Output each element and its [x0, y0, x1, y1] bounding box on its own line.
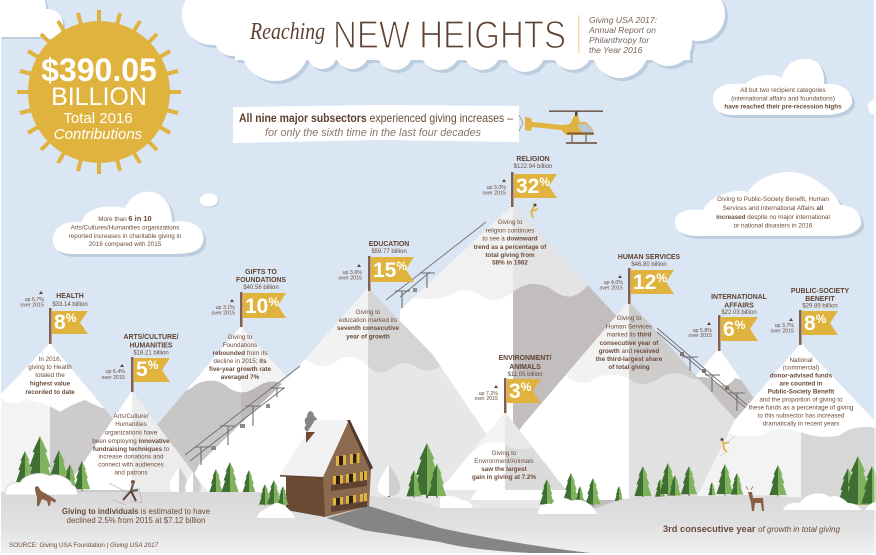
flag group: health: [20, 291, 88, 344]
text: public-society: these funds as a percentage of giving: [749, 404, 854, 412]
flag group: human services: $46.80 billion: [631, 262, 667, 268]
flag group: arts: %: [148, 358, 159, 372]
text: religion: [474, 219, 547, 266]
sun text: amount: $390.05: [41, 52, 157, 88]
cloud: recipient categories: have reached their pre-recession highs: [724, 104, 842, 110]
third consecutive year: 3rd consecutive year of growth in total giving: [663, 524, 840, 534]
small cloud right edge: [868, 99, 876, 115]
white trees: [170, 465, 400, 500]
flag group: environment: %: [521, 380, 532, 394]
text: human services: Giving to: [617, 315, 642, 322]
text: health: [25, 356, 75, 396]
mountain: public-society: [690, 343, 876, 510]
text: religion: religion continues: [485, 228, 535, 234]
cloud: disasters note: [675, 172, 864, 239]
flag group: religion: over 2015: [482, 190, 506, 196]
flag group: public-society: PUBLIC-SOCIETY: [791, 288, 849, 295]
flag group: public-society: $29.89 billion: [802, 304, 838, 310]
report subtitle: Giving USA 2017:: [589, 15, 658, 25]
report subtitle: Annual Report on: [588, 25, 656, 35]
cloud: recipient categories: [713, 59, 855, 118]
windows: [333, 453, 367, 507]
text: foundations: averaged 7%: [221, 374, 260, 381]
trees and snow by the house: [257, 480, 295, 518]
ski lift: left: [185, 222, 486, 465]
flag group: environment: ANIMALS: [509, 364, 541, 371]
cloud: recipient categories: All but two recipient categories: [740, 87, 826, 94]
road: [327, 506, 590, 553]
flag group: education: EDUCATION: [369, 241, 409, 248]
flag group: religion: 32: [516, 175, 539, 198]
text: religion: total giving from: [485, 252, 535, 259]
side wall: [286, 476, 325, 517]
flag group: human services: %: [656, 271, 667, 285]
mountain: arts: [65, 391, 210, 495]
text: religion: Giving to: [498, 219, 523, 226]
text: public-society: and the proportion of giving to: [759, 396, 843, 404]
text: environment: Environment/Animals: [474, 458, 534, 465]
sun text: billion: BILLION: [51, 83, 147, 111]
chimney: [306, 432, 315, 443]
flag group: religion: up 3.0%: [487, 185, 506, 191]
text: arts: increase donations and: [98, 454, 164, 460]
flag group: foundations: FOUNDATIONS: [236, 277, 286, 284]
text: public-society: dramatically in recent years: [763, 420, 839, 428]
flag group: education: [338, 241, 414, 291]
balconies: [331, 480, 367, 491]
sun: total contributions: [17, 10, 181, 174]
text: arts: Arts/Culture/: [114, 413, 149, 420]
flag group: environment: $11.05 billion: [508, 372, 542, 378]
cloud: disasters note: or national disasters in 2016: [734, 222, 813, 230]
title: [249, 14, 566, 57]
cloud: disasters note: Services and International Affairs all: [723, 205, 824, 212]
front wall: [323, 422, 371, 517]
flag group: arts: HUMANITIES: [130, 342, 173, 350]
text: environment: [472, 450, 536, 481]
cloud: disasters note: increased despite no major international: [716, 214, 830, 221]
flag group: human services: over 2015: [599, 286, 623, 292]
flag group: human services: up 4.0%: [604, 280, 623, 286]
flag group: environment: ENVIRONMENT/: [499, 355, 551, 362]
flag group: public-society: 8: [804, 312, 816, 335]
flag group: international: 6: [723, 318, 735, 341]
flag group: religion: [482, 156, 557, 207]
mountain: religion: [400, 206, 616, 508]
text: education: Giving to: [356, 309, 381, 316]
text: health: highest value: [30, 380, 71, 388]
banner: [233, 105, 519, 143]
cross-country skier: [109, 480, 143, 505]
flag group: environment: over 2015: [474, 396, 498, 402]
flag group: health: over 2015: [20, 302, 44, 308]
deer: left: [35, 486, 56, 506]
cloud: arts organizations: 2016 compared with 2015: [89, 241, 162, 248]
flag group: education: over 2015: [338, 276, 362, 282]
text: human services: Human Services: [606, 324, 652, 330]
flag group: foundations: 10: [245, 295, 268, 318]
cloud: title: [182, 0, 728, 84]
text: religion: to see a downward: [482, 236, 538, 242]
cloud: arts organizations: reported increases in charitable giving in: [69, 233, 182, 240]
text: public-society: National: [789, 357, 813, 364]
text: giving by individuals: Giving to individuals is estimated to have: [62, 507, 210, 516]
flag group: international: up 5.8%: [693, 328, 712, 334]
text: giving by individuals: declined 2.5% from 2015 at $7.12 billion: [67, 516, 205, 525]
ground: [0, 492, 876, 553]
flag group: environment: [474, 355, 551, 413]
flag group: education: %: [396, 259, 407, 273]
report subtitle: [588, 15, 658, 55]
flag group: public-society: up 3.7%: [775, 323, 794, 329]
cloud: disasters note: Giving to Public-Society Benefit, Human: [717, 196, 829, 203]
flag group: arts: over 2015: [101, 375, 125, 381]
text: arts: and patrons: [114, 470, 148, 476]
text: public-society: Public-Society Benefit: [768, 388, 835, 396]
flag group: religion: RELIGION: [516, 156, 550, 163]
text: public-society: [749, 357, 854, 428]
flag group: health: up 5.7%: [25, 297, 44, 303]
flag group: environment: up 7.2%: [479, 391, 498, 397]
flag group: human services: HUMAN SERVICES: [618, 254, 681, 261]
flag group: human services: 12: [633, 271, 656, 294]
text: arts: connect with audiences: [98, 462, 164, 468]
chimney smoke: [304, 411, 318, 432]
text: education: education marked its: [339, 317, 397, 324]
text: foundations: five-year growth rate: [209, 366, 271, 373]
name and amount: HEALTH: [56, 293, 84, 300]
mountain: education: [194, 288, 544, 508]
text: education: year of growth: [346, 334, 390, 340]
cloud: arts organizations: More than 6 in 10: [98, 214, 152, 223]
pole: [49, 308, 52, 344]
mountain: international: [696, 350, 754, 420]
text: health: totaled the: [35, 372, 65, 379]
report subtitle: the Year 2016: [589, 45, 643, 55]
flag group: international: %: [735, 318, 746, 332]
cloud: top-left: [0, 0, 65, 41]
banner: line two: for only the sixth time in the last four decades: [265, 127, 481, 139]
flag: [52, 311, 88, 334]
flag group: foundations: %: [268, 295, 279, 309]
flag group: international: [688, 294, 767, 351]
text: health: giving to Health: [28, 364, 72, 371]
text: health: recorded to date: [25, 389, 75, 396]
text: public-society: donor-advised funds: [770, 372, 833, 380]
small cloud bubble: [200, 194, 219, 208]
flag group: foundations: over 2015: [211, 310, 235, 316]
flag group: foundations: $40.56 billion: [243, 285, 279, 291]
text: arts: fundraising techniques to: [93, 446, 170, 453]
mountain: health: [1, 344, 130, 492]
flag group: education: 15: [373, 259, 396, 282]
text: environment: saw the largest: [481, 466, 528, 473]
flag group: foundations: GIFTS TO: [245, 269, 277, 276]
text: religion: trend as a percentage of: [474, 244, 547, 251]
text: giving by individuals: [62, 507, 210, 525]
text: education: seventh consecutive: [337, 325, 399, 332]
flag group: education: $59.77 billion: [371, 249, 407, 255]
flag group: religion: %: [539, 175, 550, 189]
title: reaching: Reaching: [249, 19, 325, 45]
flag group: religion: $122.94 billion: [514, 164, 552, 170]
divider: [578, 15, 580, 54]
text: foundations: Giving to: [228, 334, 253, 341]
flag group: public-society: [770, 288, 849, 345]
text: arts: Humanities: [115, 421, 147, 428]
text: public-society: (commercial): [783, 364, 819, 372]
flag group: human services: [599, 254, 681, 304]
flag group: foundations: up 3.1%: [216, 305, 235, 311]
flag group: public-society: over 2015: [770, 328, 794, 334]
skier on public slope: [720, 436, 735, 456]
text: foundations: rebounded from its: [213, 350, 267, 357]
ski lift: right: [657, 328, 747, 411]
text: arts: organizations have: [105, 430, 158, 436]
text: education: [337, 309, 399, 340]
skier on religion peak: [531, 204, 538, 218]
report subtitle: Philanthropy for: [589, 35, 650, 45]
sun text: contributions: Contributions: [54, 126, 143, 143]
text: foundations: [209, 334, 271, 381]
snow bushes: [5, 474, 876, 514]
flag group: health: $33.14 billion: [52, 302, 88, 308]
text: environment: Giving to: [492, 450, 517, 457]
cloud: arts organizations: [53, 192, 206, 257]
flag group: arts: $18.21 billion: [133, 350, 169, 356]
sun text: total 2016: Total 2016: [63, 110, 133, 127]
flag group: public-society: %: [816, 312, 827, 326]
text: public-society: to this subsector has increased: [758, 412, 845, 420]
text: arts: been employing innovative: [92, 438, 170, 445]
text: foundations: Foundations: [223, 342, 257, 349]
text: human services: marked its third: [607, 332, 652, 338]
deer: right: [746, 486, 764, 511]
helicopter: [519, 110, 603, 143]
text: human services: the third-largest share: [596, 356, 663, 363]
banner: line one: All nine major subsectors experienced giving increases –: [239, 112, 513, 125]
flag group: public-society: BENEFIT: [805, 296, 836, 303]
flag group: international: over 2015: [688, 333, 712, 339]
text: human services: [596, 315, 663, 371]
text: religion: 58% in 1982: [492, 260, 528, 266]
source: SOURCE: Giving USA Foundation | Giving USA 2017: [9, 542, 159, 549]
roof: [280, 420, 347, 477]
text: foundations: decline in 2015; its: [213, 358, 267, 365]
flag group: international: $22.03 billion: [721, 310, 757, 316]
text: public-society: are counted in: [779, 380, 823, 388]
flag group: arts: [101, 334, 179, 392]
mountain: human services: [470, 302, 736, 500]
text: human services: growth and received: [599, 348, 659, 355]
cloud: recipient categories: (international affairs and foundations): [731, 96, 835, 102]
mountain: environment: [440, 412, 566, 490]
cloud: arts organizations: Arts/Cultures/Humanities organizations: [71, 224, 179, 232]
flag group: international: AFFAIRS: [724, 302, 754, 310]
title: new heights: NEW HEIGHTS: [333, 14, 566, 57]
mountain: foundations: [157, 327, 288, 474]
flag group: arts: 5: [136, 358, 148, 381]
text: human services: of total giving: [608, 364, 650, 371]
house: [280, 411, 373, 517]
flag group: international: INTERNATIONAL: [711, 294, 767, 301]
trees: back row: [16, 436, 876, 508]
percent: %: [66, 311, 77, 325]
flag group: education: up 3.6%: [343, 270, 362, 276]
flag group: foundations: [211, 269, 286, 327]
text: human services: consecutive year of: [600, 340, 659, 347]
flag group: arts: ARTS/CULTURE/: [124, 334, 179, 341]
text: health: In 2016,: [39, 356, 62, 363]
flag group: environment: 3: [509, 380, 521, 403]
percent: 8: [54, 311, 66, 334]
change: [39, 291, 43, 294]
text: environment: gain in giving at 7.2%: [472, 474, 536, 481]
flag group: arts: up 6.4%: [106, 369, 125, 375]
text: arts: [92, 413, 170, 476]
